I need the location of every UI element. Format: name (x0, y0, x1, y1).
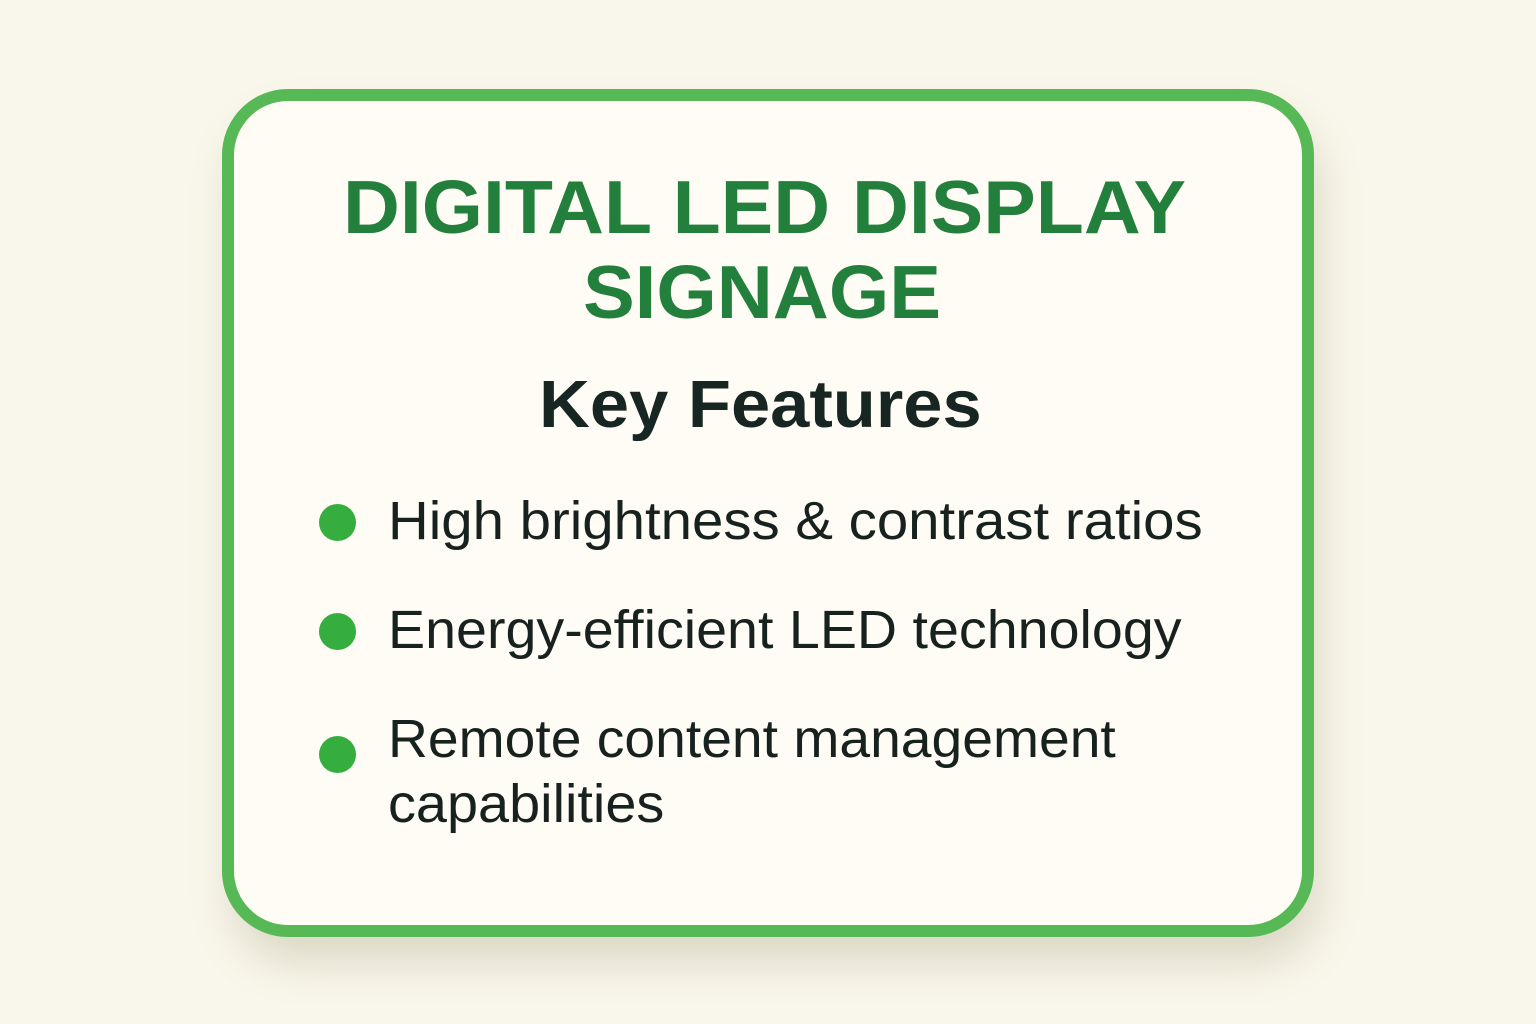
bullet icon 3 (319, 736, 356, 773)
bullet icon 1 (319, 504, 356, 541)
feature text 3: Remote content management (388, 709, 1116, 769)
feature text 1: High brightness & contrast ratios (388, 491, 1203, 551)
feature text 3 (388, 709, 1116, 834)
feature text 3: capabilities (388, 774, 664, 834)
feature text 2: Energy-efficient LED technology (388, 600, 1182, 660)
title line 1: DIGITAL LED DISPLAY (343, 165, 1186, 249)
panel: feature card (222, 89, 1314, 937)
heading: key features: Key Features (539, 367, 982, 442)
title line 2: SIGNAGE (583, 250, 941, 334)
bullet icon 2 (319, 613, 356, 650)
